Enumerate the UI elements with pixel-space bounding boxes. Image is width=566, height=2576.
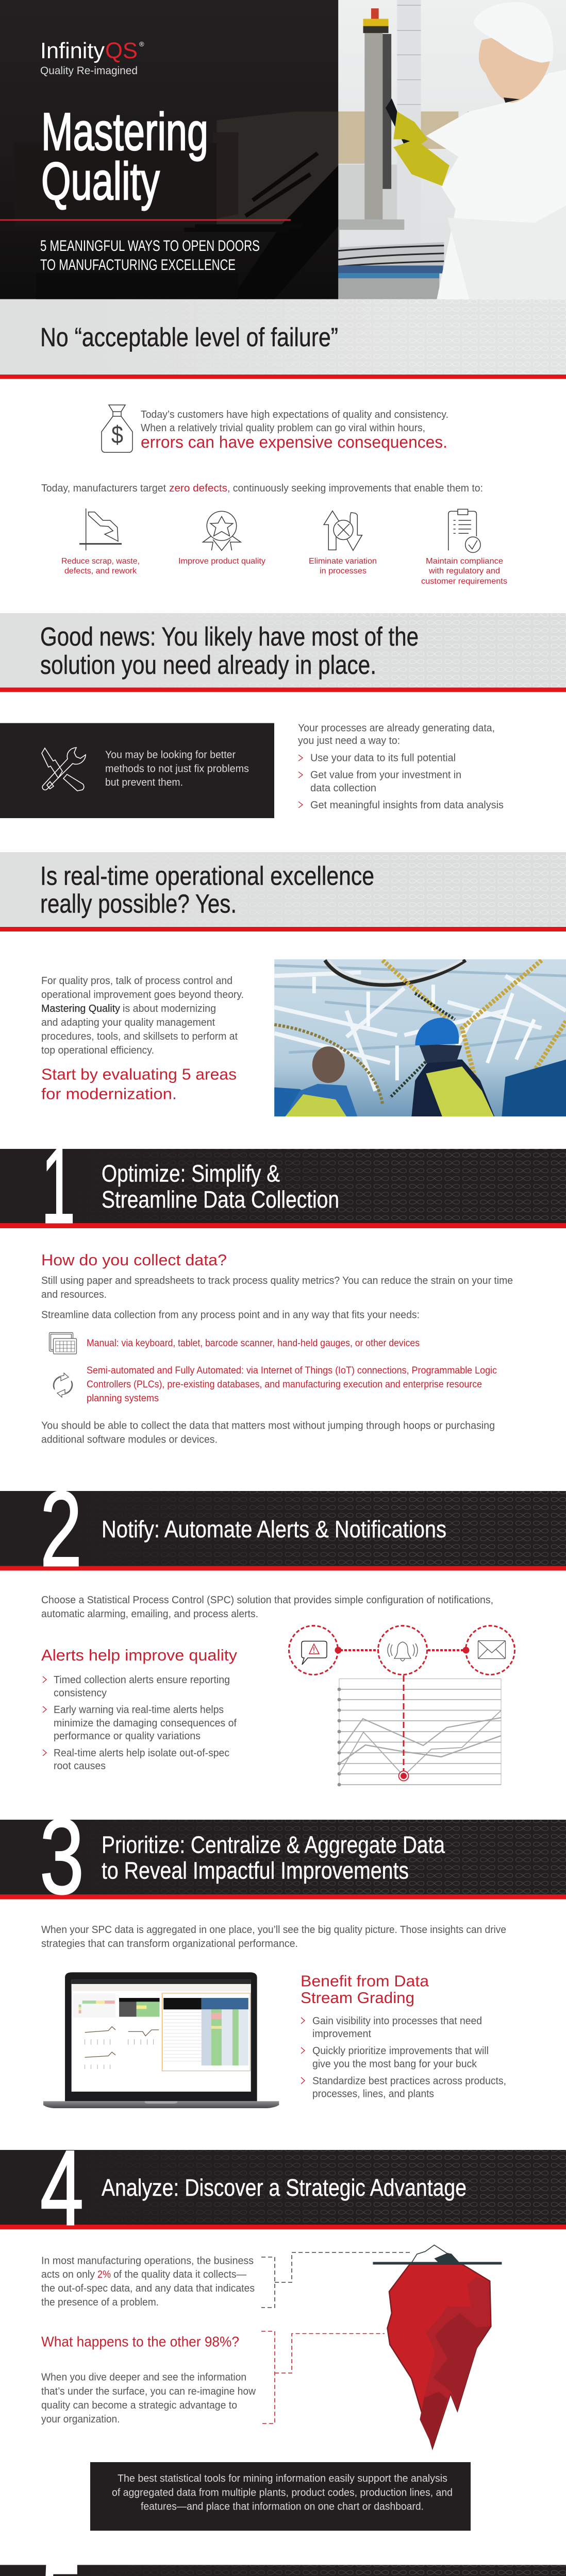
icon: envelope — [478, 1640, 505, 1659]
text: automated collection: Controllers (PLCs), pre-existing databases, and manufacturing execution and enterprise resource — [87, 1379, 482, 1390]
logo — [41, 42, 144, 76]
captions: four benefits: Eliminate variation — [309, 557, 377, 566]
text: SPC solution — [41, 1595, 493, 1620]
photo: factory conveyor and workers — [274, 959, 566, 1116]
text: customers expectations: Today’s customers have high expectations of quality and consistency. — [141, 409, 448, 420]
list: already generating data — [298, 722, 504, 811]
band: step 5 — [0, 2543, 566, 2576]
captions: four benefits — [61, 557, 507, 586]
band: no acceptable level of failure — [0, 299, 566, 379]
list: data stream grading: Quickly prioritize improvements that will — [312, 2045, 489, 2057]
text: how do you collect data — [41, 1251, 513, 1321]
text: other 98 percent: quality can become a strategic advantage to — [41, 2400, 237, 2411]
band: good news: solution you need already in place. — [40, 650, 376, 680]
band: step 2: Notify: Automate Alerts & Notifications — [102, 1516, 446, 1543]
photo: worker with tablet — [0, 0, 566, 299]
icon: sync arrows — [53, 1373, 73, 1397]
list: data stream grading — [301, 1972, 506, 2100]
list: data stream grading: Benefit from Data — [301, 1972, 429, 1990]
logo: ® — [139, 40, 144, 48]
text: other 98 percent: that’s under the surface, you can re-imagine how — [41, 2386, 256, 2397]
text: other 98 percent: What happens to the other 98%? — [41, 2334, 239, 2349]
icon: ringing bell — [388, 1642, 418, 1661]
panel: statistical tools callout — [90, 2462, 471, 2531]
subtitle: TO MANUFACTURING EXCELLENCE — [40, 257, 236, 274]
text: mastering quality intro: For quality pros, talk of process control and — [41, 975, 232, 987]
list: already generating data: you just need a way to: — [298, 735, 400, 747]
text: other 98 percent — [41, 2334, 256, 2425]
text: SPC solution: automatic alarming, emailing, and process alerts. — [41, 1608, 258, 1620]
band: good news: Good news: You likely have most of the — [40, 622, 419, 651]
list: alerts help improve quality: Timed collection alerts ensure reporting — [54, 1674, 230, 1686]
list: data stream grading: give you the most bang for your buck — [312, 2059, 477, 2070]
text: mastering quality intro: operational improvement goes beyond theory. — [41, 989, 244, 1001]
text: how do you collect data: How do you collect data? — [41, 1251, 227, 1269]
panel: dark callout with tools: You may be looking for better — [105, 749, 236, 760]
band: step 4: 4 — [40, 2128, 84, 2247]
text: 2 percent of data: 2% — [97, 2269, 111, 2280]
chart: process alert line chart — [338, 1675, 501, 1786]
band: step 4 — [0, 2128, 566, 2247]
icon: quality badge — [203, 511, 241, 550]
text: SPC data aggregated: When your SPC data is aggregated in one place, you’ll see the big quality picture. Those insights can drive — [41, 1924, 506, 1936]
list: alerts help improve quality: consistency — [54, 1688, 107, 1699]
text: how do you collect data: Streamline data collection from any process point and in any way that fits your needs: — [41, 1310, 420, 1321]
list: data stream grading: Stream Grading — [301, 1989, 414, 2007]
title: Mastering — [41, 102, 208, 161]
list: alerts help improve quality: minimize the damaging consequences of — [54, 1718, 237, 1729]
text: mastering quality intro: procedures, tools, and skillsets to perform at — [41, 1031, 238, 1042]
list: data stream grading: Standardize best practices across products, — [312, 2075, 506, 2087]
bracket: grey callout to iceberg tip — [261, 2252, 411, 2308]
list: already generating data: Use your data to its full potential — [310, 752, 456, 764]
list: data stream grading: improvement — [312, 2028, 371, 2040]
list: data stream grading: Gain visibility into processes that need — [312, 2015, 482, 2027]
icon: eliminate variation — [324, 511, 362, 550]
text: automated collection: planning systems — [87, 1393, 159, 1404]
text: how do you collect data: Still using paper and spreadsheets to track process quality metrics? You can reduce the strain on your time — [41, 1275, 513, 1286]
text: 2 percent of data: the presence of a problem. — [41, 2297, 159, 2308]
band: real-time excellence: Is real-time operational excellence — [40, 861, 374, 890]
text: customers expectations: When a relatively trivial quality problem can go viral within hours, — [141, 422, 425, 434]
list: alerts help improve quality: performance or quality variations — [54, 1731, 201, 1742]
text: collect what matters: additional software modules or devices. — [41, 1434, 218, 1446]
icon: alert bubble — [302, 1641, 327, 1665]
logo: QS — [105, 38, 138, 63]
title — [41, 102, 208, 211]
band: step 3 — [0, 1797, 566, 1916]
text: mastering quality intro: and adapting your quality management — [41, 1017, 215, 1028]
list: alerts help improve quality: Real-time alerts help isolate out-of-spec — [54, 1748, 229, 1759]
band: no acceptable level of failure: No “acceptable level of failure” — [40, 323, 338, 352]
text: automated collection — [87, 1365, 497, 1404]
text: SPC data aggregated — [41, 1924, 506, 1950]
list: already generating data: data collection — [310, 783, 376, 794]
icon: wrench and screwdriver — [42, 748, 86, 791]
panel: statistical tools callout: features—and place that information on one chart or dashboard. — [141, 2501, 424, 2512]
text: mastering quality intro: is about modernizing — [123, 1003, 216, 1014]
text: 2 percent of data — [41, 2256, 255, 2308]
list: alerts help improve quality — [41, 1646, 238, 1772]
text: mastering quality intro: Mastering Quality — [41, 1003, 120, 1014]
band: good news — [0, 613, 566, 692]
captions: four benefits: customer requirements — [421, 577, 507, 586]
captions: four benefits: defects, and rework — [64, 567, 137, 575]
text: other 98 percent: When you dive deeper and see the information — [41, 2372, 246, 2383]
icon: money bag — [102, 405, 132, 452]
list: already generating data: Your processes are already generating data, — [298, 722, 495, 734]
text: mastering quality intro: Start by evaluating 5 areas — [41, 1065, 237, 1083]
subtitle: 5 MEANINGFUL WAYS TO OPEN DOORS — [40, 238, 260, 255]
text: how do you collect data: and resources. — [41, 1289, 107, 1300]
illustration: laptop dashboard — [43, 1972, 279, 2108]
band: real-time excellence — [0, 852, 566, 931]
band: step 3: 3 — [40, 1797, 84, 1916]
list: alerts help improve quality: root causes — [54, 1760, 106, 1772]
text: 2 percent of data: of the quality data it collects— — [113, 2269, 246, 2280]
text: 2 percent of data: acts on only — [41, 2269, 95, 2280]
captions: four benefits: Improve product quality — [178, 557, 265, 566]
subtitle — [40, 240, 259, 270]
text: zero defects: , continuously seeking improvements that enable them to: — [227, 483, 483, 494]
band: step 1: Optimize: Simplify & — [102, 1160, 280, 1187]
band: step 1: 1 — [41, 1126, 75, 1245]
panel: dark callout with tools: methods to not just fix problems — [105, 764, 249, 775]
band: step 2 — [0, 1469, 566, 1588]
icon: downward chart — [79, 509, 122, 550]
text: SPC solution: Choose a Statistical Process Control (SPC) solution that provides simple configuration of notifications, — [41, 1595, 493, 1606]
text: automated collection: Semi-automated and Fully Automated: via Internet of Things (IoT) connections, Programmable Logic — [87, 1365, 497, 1376]
icon: tablet and keyboard — [49, 1332, 76, 1354]
text: zero defects: Today, manufacturers target — [41, 483, 166, 494]
panel: dark callout with tools — [0, 723, 274, 818]
band: step 1 — [0, 1126, 566, 1245]
text: other 98 percent: your organization. — [41, 2414, 120, 2425]
list: alerts help improve quality: Alerts help improve quality — [41, 1646, 238, 1664]
band: step 1: Streamline Data Collection — [102, 1186, 339, 1213]
band: step 3: Prioritize: Centralize & Aggregate Data — [102, 1831, 445, 1858]
text: collect what matters — [41, 1420, 495, 1446]
illustration: red iceberg — [373, 2245, 502, 2448]
list: already generating data: Get meaningful insights from data analysis — [310, 800, 504, 811]
captions: four benefits: Reduce scrap, waste, — [61, 557, 140, 566]
text: 2 percent of data: the out-of-spec data, and any data that indicates — [41, 2283, 255, 2294]
text: SPC data aggregated: strategies that can transform organizational performance. — [41, 1938, 298, 1950]
text: 2 percent of data: In most manufacturing operations, the business — [41, 2256, 254, 2267]
logo: Quality Re-imagined — [40, 65, 138, 77]
captions: four benefits: in processes — [320, 567, 367, 575]
text: mastering quality intro: for modernization. — [41, 1085, 177, 1103]
band: step 4: Analyze: Discover a Strategic Advantage — [102, 2174, 467, 2201]
list: data stream grading: processes, lines, and plants — [312, 2089, 434, 2100]
band: step 2: 2 — [40, 1469, 82, 1588]
icon: compliance clipboard — [448, 509, 480, 552]
panel: hero — [0, 0, 566, 299]
panel: dark callout with tools: but prevent them. — [105, 777, 183, 788]
logo: Infinity — [40, 38, 105, 63]
text: collect what matters: You should be able to collect the data that matters most without jumping through hoops or purchasing — [41, 1420, 495, 1431]
diagram: alert circles — [289, 1626, 514, 1674]
text: zero defects — [41, 483, 483, 494]
list: alerts help improve quality: Early warning via real-time alerts helps — [54, 1704, 224, 1716]
captions: four benefits: Maintain compliance — [426, 557, 503, 566]
band: step 3: to Reveal Impactful Improvements — [102, 1857, 409, 1884]
bracket: red callout to iceberg body — [261, 2331, 385, 2424]
text: zero defects: zero defects — [169, 483, 227, 494]
list: already generating data: Get value from your investment in — [310, 770, 461, 781]
icon: money bag: $ — [111, 421, 123, 449]
text: manual collection: Manual: via keyboard, tablet, barcode scanner, hand-held gauges, or other devices — [87, 1338, 420, 1349]
title: Quality — [41, 151, 160, 211]
panel: statistical tools callout: of aggregated data from multiple plants, product codes, production lines, and — [112, 2487, 453, 2499]
text: customers expectations — [141, 409, 448, 451]
text: mastering quality intro — [41, 975, 244, 1103]
captions: four benefits: with regulatory and — [428, 567, 500, 575]
text: mastering quality intro: top operational efficiency. — [41, 1045, 154, 1056]
text: customers expectations: errors can have expensive consequences. — [141, 433, 447, 451]
panel: statistical tools callout: The best statistical tools for mining information easily support the analysis — [118, 2473, 447, 2484]
band: real-time excellence: really possible? Yes. — [40, 889, 237, 918]
